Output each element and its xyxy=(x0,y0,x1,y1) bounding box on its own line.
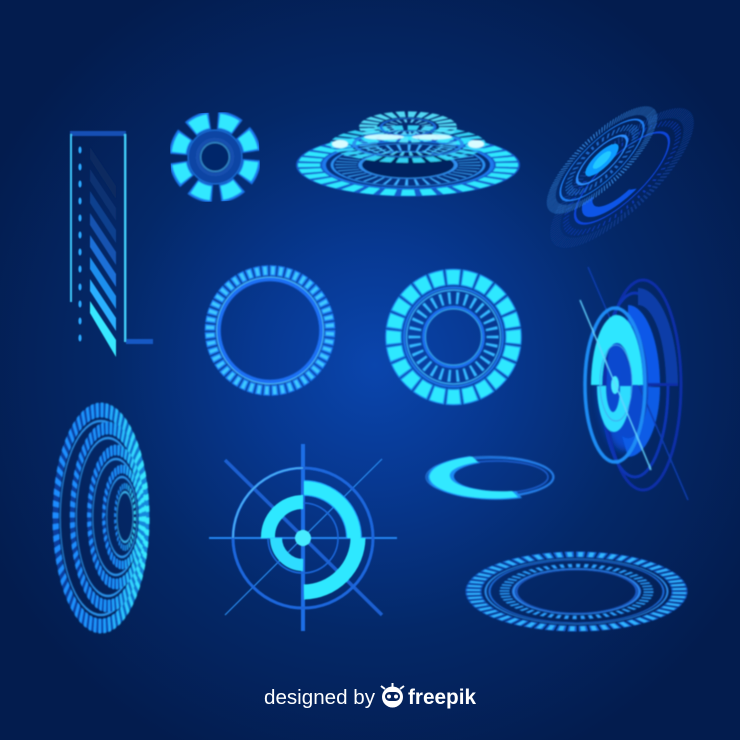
icon: vertical panel with stripes xyxy=(70,131,153,357)
icon: wide segmented ring xyxy=(394,277,514,397)
lower saucer ring xyxy=(309,137,507,193)
ring five xyxy=(115,486,135,548)
front disc xyxy=(538,97,666,223)
icon: gear ring xyxy=(177,119,253,195)
icon: stacked flying-saucer rings xyxy=(309,114,507,193)
top saucer ring xyxy=(368,114,448,140)
credit: designed by: designed by xyxy=(264,686,376,709)
footer credit xyxy=(264,683,476,709)
ring four xyxy=(104,469,140,565)
ring one xyxy=(56,410,146,626)
back disc xyxy=(538,95,706,261)
icon: segmented thin ring xyxy=(210,270,330,390)
middle saucer ring xyxy=(340,128,476,160)
white highlights xyxy=(332,134,484,148)
icon: robot mascot xyxy=(381,683,404,708)
icon: crescent ellipse xyxy=(426,456,554,500)
ring two xyxy=(72,428,144,606)
icon: bottom flat ring xyxy=(474,554,680,629)
icon: right vertical hologram xyxy=(580,267,688,500)
credit: freepik: freepik xyxy=(408,685,476,709)
icon: nested side-view rings xyxy=(56,410,146,626)
icon: crosshair target xyxy=(209,444,397,631)
ring three xyxy=(89,450,143,584)
icon: tilted hatched discs xyxy=(538,95,706,261)
blue halo xyxy=(599,319,651,451)
